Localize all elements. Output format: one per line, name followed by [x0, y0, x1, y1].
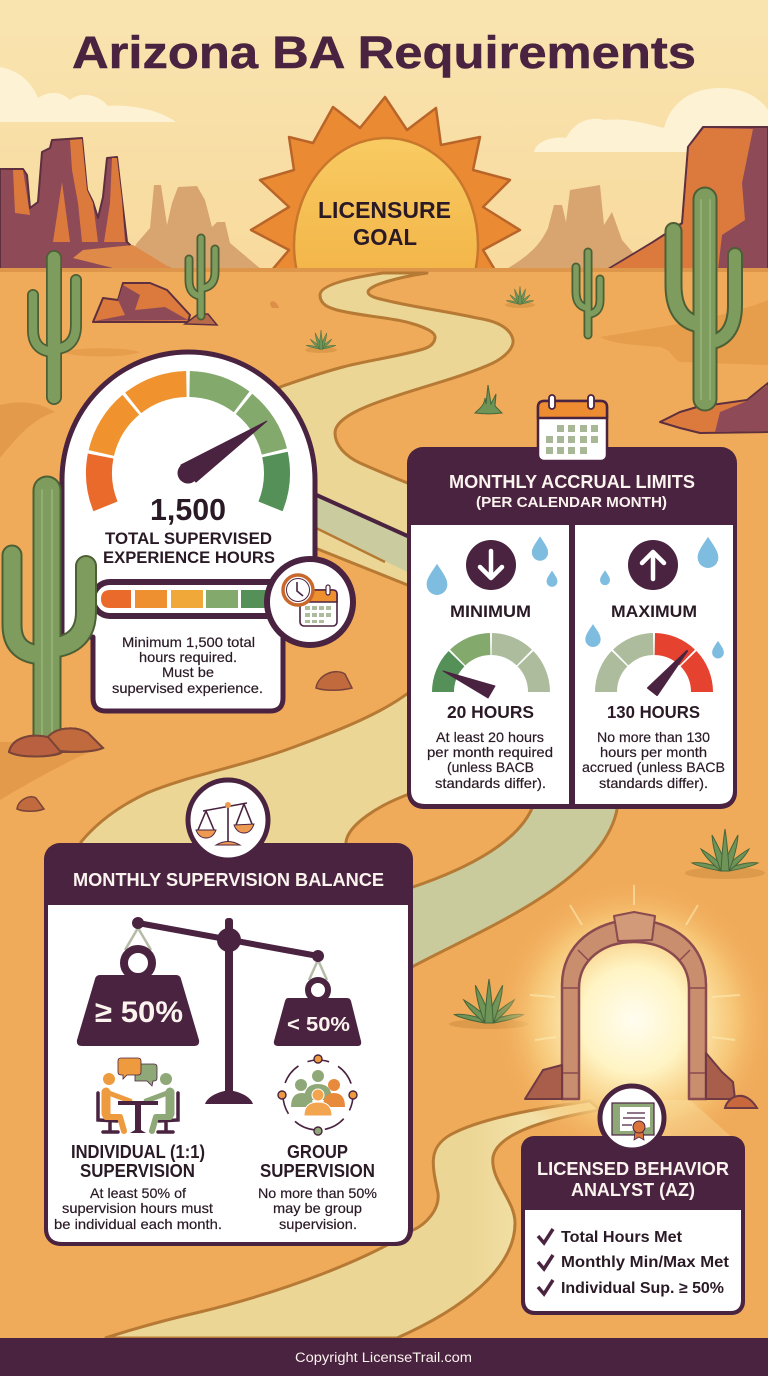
icon: scales — [188, 780, 268, 860]
clouds — [0, 67, 768, 152]
label: group supervision: GROUP — [287, 1142, 348, 1162]
description: individual: be individual each month. — [54, 1216, 222, 1232]
weight: at least 50 percent — [77, 949, 199, 1046]
distant mesas — [120, 185, 648, 270]
heading: (PER CALENDAR MONTH) — [476, 495, 667, 511]
description: group: supervision. — [279, 1216, 357, 1232]
winding path: middle section — [81, 690, 618, 968]
sun: licensure goal: GOAL — [353, 224, 417, 250]
label: individual supervision: INDIVIDUAL (1:1) — [71, 1142, 205, 1162]
cactus: small right — [576, 252, 600, 335]
heading: ANALYST (AZ) — [571, 1180, 695, 1200]
rocks — [9, 283, 768, 811]
background: sky — [0, 0, 768, 272]
footer: Copyright LicenseTrail.com — [295, 1350, 472, 1365]
description: individual: supervision hours must — [62, 1200, 213, 1216]
description: group: No more than 50% — [258, 1185, 377, 1201]
description: hours required. — [139, 649, 237, 665]
icon: clock and calendar — [267, 559, 353, 645]
weight: under 50 percent — [274, 980, 361, 1046]
sun: licensure goal — [250, 96, 522, 268]
title: Arizona BA Requirements — [72, 27, 696, 78]
heading: LICENSED BEHAVIOR — [537, 1159, 729, 1179]
winding path: upper section — [270, 273, 513, 590]
description: maximum: standards differ). — [599, 775, 708, 791]
description: supervised experience. — [112, 680, 263, 696]
description: minimum: per month required — [427, 744, 553, 760]
icon: down arrow — [466, 540, 516, 590]
figure: 1,500: 1,500 — [150, 492, 226, 527]
description: maximum: accrued (unless BACB — [582, 759, 725, 775]
description: Must be — [162, 664, 214, 680]
icon: up arrow — [628, 540, 678, 590]
description: group: may be group — [273, 1200, 362, 1216]
icon: calendar — [538, 395, 607, 461]
gauge: total hours — [99, 384, 277, 506]
description: individual: At least 50% of — [90, 1185, 186, 1201]
panel: monthly accrual limits — [407, 395, 737, 809]
label: minimum: MINIMUM — [450, 602, 531, 621]
description: minimum: standards differ). — [435, 775, 546, 791]
water drops — [427, 536, 724, 658]
checklist: Monthly Min/Max Met — [561, 1254, 729, 1271]
path: connector band — [312, 493, 412, 574]
glowing stone archway — [494, 880, 768, 1160]
cactus base rocks — [9, 728, 103, 756]
balance scale — [125, 917, 327, 1104]
label: maximum: MAXIMUM — [611, 602, 697, 621]
description: maximum: hours per month — [600, 744, 707, 760]
cactus: large right — [674, 199, 735, 399]
checklist: Total Hours Met — [561, 1229, 682, 1246]
panel: monthly supervision balance — [44, 780, 413, 1246]
weight: under 50 percent: < 50% — [287, 1014, 350, 1036]
winding path: lower section — [105, 1101, 600, 1338]
label: total supervised experience hours: TOTAL SUPERVISED — [105, 529, 272, 548]
progress bar — [93, 582, 298, 616]
heading: MONTHLY SUPERVISION BALANCE — [73, 870, 384, 890]
label: group supervision: SUPERVISION — [260, 1161, 375, 1181]
label: individual supervision: SUPERVISION — [80, 1161, 195, 1181]
heading: MONTHLY ACCRUAL LIMITS — [449, 472, 695, 492]
checklist — [538, 1229, 729, 1297]
icon: group supervision — [278, 1055, 357, 1135]
panel: licensed behavior analyst — [521, 1086, 745, 1315]
description: minimum: At least 20 hours — [436, 729, 544, 745]
left mesa — [0, 138, 173, 270]
agave plants — [305, 286, 765, 1029]
right mesa — [605, 127, 768, 271]
footer — [0, 1338, 768, 1376]
gauge: minimum — [443, 644, 539, 698]
gauge: maximum — [606, 644, 702, 695]
description: minimum: (unless BACB — [447, 759, 534, 775]
description: Minimum 1,500 total — [122, 634, 255, 650]
description: maximum: No more than 130 — [597, 729, 710, 745]
icon: certificate — [600, 1086, 664, 1150]
sun: licensure goal: LICENSURE — [318, 197, 451, 223]
label: total supervised experience hours: EXPERIENCE HOURS — [103, 548, 275, 567]
weight: at least 50 percent: ≥ 50% — [95, 996, 183, 1029]
icon: individual supervision — [98, 1058, 178, 1133]
cactus: large left — [12, 490, 86, 736]
panel: total supervised experience hours — [62, 352, 353, 711]
value: 130 hours: 130 HOURS — [607, 702, 700, 722]
cactus: small left — [189, 238, 215, 316]
checklist: Individual Sup. ≥ 50% — [561, 1280, 724, 1297]
desert ground — [0, 268, 768, 1340]
cactus: far left — [33, 258, 76, 397]
value: 20 hours: 20 HOURS — [447, 702, 534, 722]
